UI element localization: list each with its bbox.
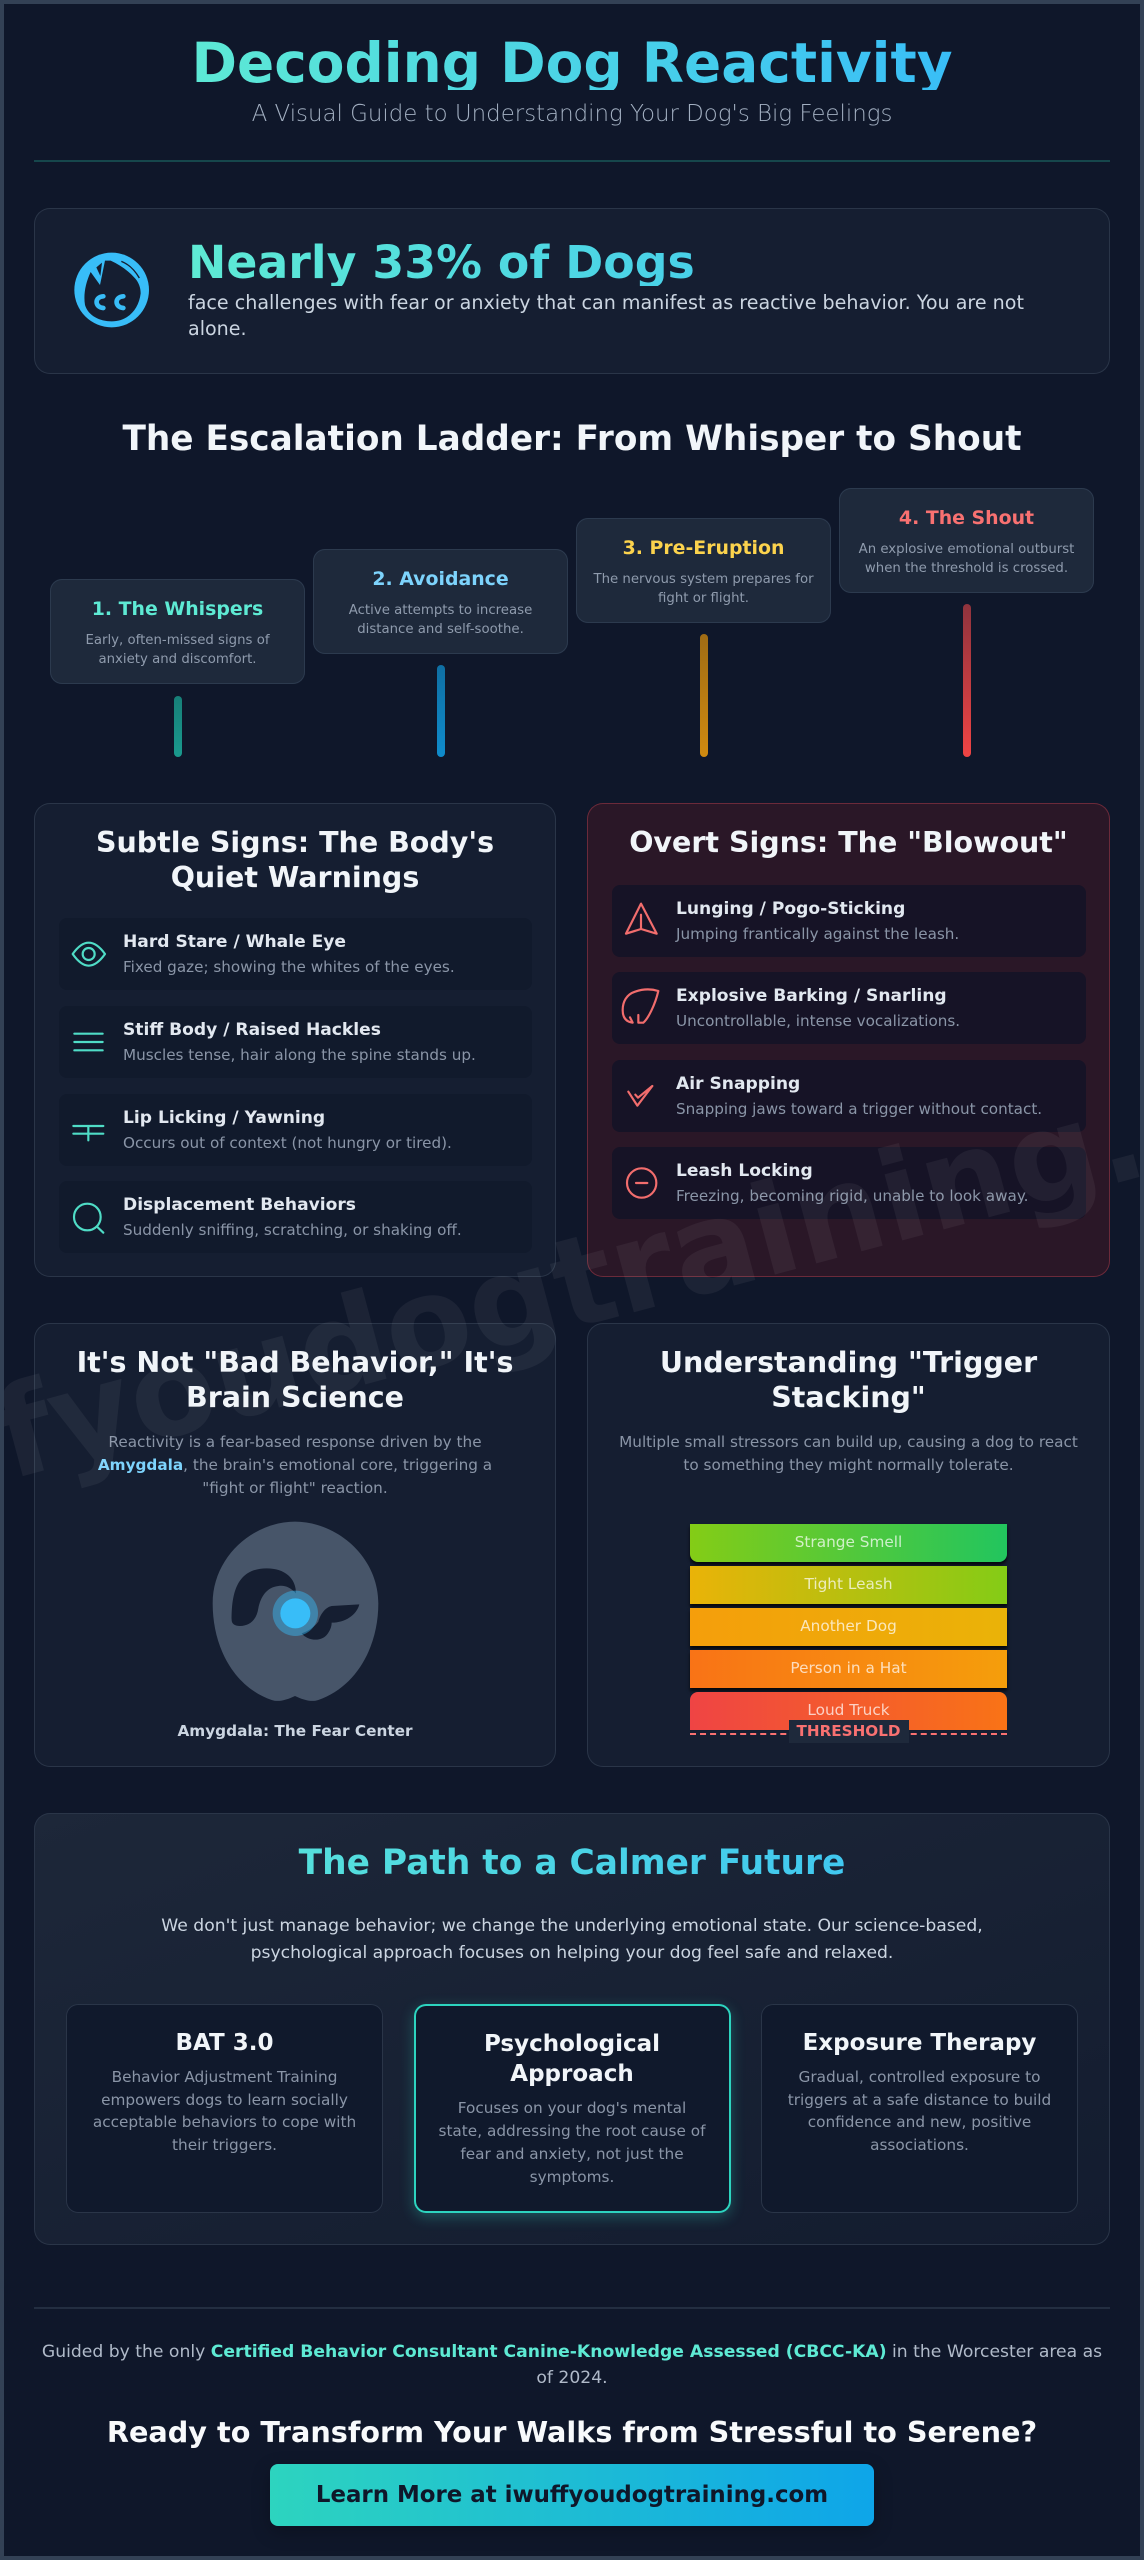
- panel heading: [77, 1346, 513, 1414]
- icon: eye: [72, 942, 106, 967]
- statistic description: [188, 291, 1024, 340]
- card: exposure therapy: associations.: [870, 2136, 969, 2154]
- sign: barking: Explosive Barking / Snarling: [676, 986, 947, 1006]
- section heading: The Path to a Calmer Future: [299, 1843, 845, 1883]
- step 2: avoidance: distance and self-soothe.: [357, 622, 524, 637]
- card: exposure therapy: confidence and new, positive: [808, 2113, 1031, 2131]
- step 1: the whispers: 1. The Whispers: [92, 598, 263, 620]
- step 4: the shout: An explosive emotional outburst: [859, 542, 1074, 557]
- card: BAT 3.0: BAT 3.0: [176, 2030, 274, 2056]
- sign: displacement: Displacement Behaviors: [123, 1195, 356, 1215]
- call to action heading: Ready to Transform Your Walks from Stressful to Serene?: [107, 2415, 1037, 2449]
- block: person in a hat: Person in a Hat: [790, 1659, 907, 1677]
- step 3: pre-eruption: fight or flight.: [658, 591, 749, 606]
- card: psychological approach: [414, 2004, 730, 2213]
- explanation text: [98, 1433, 492, 1497]
- step 2: avoidance: 2. Avoidance: [372, 568, 509, 590]
- sign: barking: Uncontrollable, intense vocalizations.: [676, 1012, 960, 1030]
- step 2: avoidance: [313, 549, 568, 757]
- sign: air snapping: Snapping jaws toward a trigger without contact.: [676, 1100, 1042, 1118]
- sign: air snapping: Air Snapping: [676, 1074, 800, 1094]
- sign: lunging: Jumping frantically against the leash.: [676, 925, 959, 943]
- icon: search: [72, 1202, 104, 1234]
- step 2: avoidance: Active attempts to increase: [349, 603, 532, 618]
- card: psychological approach: Focuses on your dog's mental: [458, 2099, 686, 2117]
- sign: displacement: Suddenly sniffing, scratching, or shaking off.: [123, 1221, 462, 1239]
- sign: stiff body: [59, 1006, 532, 1078]
- step 4: the shout: 4. The Shout: [899, 507, 1034, 529]
- panel: trigger stacking: [587, 1323, 1110, 1767]
- brain caption: Amygdala: The Fear Center: [177, 1722, 413, 1740]
- icon: snap check: [627, 1084, 654, 1107]
- panel heading: Understanding "Trigger: [660, 1346, 1037, 1379]
- explanation text: to something they might normally tolerate.: [683, 1456, 1014, 1474]
- block: loud truck: Loud Truck: [807, 1701, 890, 1719]
- sign: stiff body: Stiff Body / Raised Hackles: [123, 1020, 381, 1040]
- subtitle: A Visual Guide to Understanding Your Dog's Big Feelings: [252, 101, 892, 127]
- panel heading: Brain Science: [186, 1381, 404, 1414]
- sign: stiff body: Muscles tense, hair along the spine stands up.: [123, 1046, 476, 1064]
- icon: anxious dog face: [74, 252, 149, 328]
- call to action button: [270, 2464, 874, 2526]
- panel heading: Overt Signs: The "Blowout": [629, 826, 1068, 859]
- sign: leash locking: Freezing, becoming rigid, unable to look away.: [676, 1187, 1028, 1205]
- card: psychological approach: Approach: [510, 2061, 634, 2087]
- sign: hard stare: Fixed gaze; showing the whites of the eyes.: [123, 958, 455, 976]
- sign: displacement: [59, 1181, 532, 1253]
- icon: barking mouth: [622, 988, 660, 1024]
- sign: lunging: Lunging / Pogo-Sticking: [676, 899, 905, 919]
- panel: subtle signs: [34, 803, 556, 1277]
- trigger stack chart: [688, 1524, 1008, 1743]
- step 3: pre-eruption: [576, 518, 831, 757]
- sign: lip licking: [59, 1094, 532, 1166]
- icon: locked circle: [626, 1167, 658, 1199]
- step 3: pre-eruption: 3. Pre-Eruption: [623, 537, 784, 559]
- footer divider: [34, 2307, 1110, 2309]
- card: BAT 3.0: acceptable behaviors to cope with: [93, 2113, 356, 2131]
- explanation text: "fight or flight" reaction.: [202, 1479, 388, 1497]
- card: BAT 3.0: their triggers.: [172, 2136, 277, 2154]
- panel heading: Subtle Signs: The Body's: [96, 826, 494, 859]
- statistic description: alone.: [188, 317, 247, 340]
- explanation text: [619, 1433, 1078, 1474]
- sign: lip licking: Lip Licking / Yawning: [123, 1108, 325, 1128]
- panel heading: [96, 826, 494, 894]
- step 3: pre-eruption: The nervous system prepares for: [593, 572, 814, 587]
- panel heading: Stacking": [771, 1381, 926, 1414]
- icon: warning triangle: [624, 902, 658, 935]
- sign: hard stare: [59, 918, 532, 990]
- threshold label: THRESHOLD: [796, 1722, 900, 1740]
- panel heading: [660, 1346, 1038, 1414]
- panel: statistic callout: [34, 208, 1110, 374]
- credential text: Guided by the only Certified Behavior Consultant Canine-Knowledge Assessed (CBCC-KA) in the Worcester area as: [42, 2342, 1102, 2362]
- card: exposure therapy: triggers at a safe distance to build: [788, 2091, 1051, 2109]
- explanation text: Reactivity is a fear-based response driven by the: [108, 1433, 482, 1451]
- card: exposure therapy: Exposure Therapy: [803, 2030, 1036, 2056]
- call to action button: Learn More at iwuffyoudogtraining.com: [316, 2482, 828, 2508]
- block: strange smell: [690, 1524, 1007, 1562]
- block: another dog: Another Dog: [800, 1617, 897, 1635]
- block: loud truck: [690, 1692, 1007, 1730]
- sign: hard stare: Hard Stare / Whale Eye: [123, 932, 346, 952]
- intro text: [161, 1916, 983, 1963]
- sign: leash locking: Leash Locking: [676, 1161, 813, 1181]
- panel: overt signs: [587, 803, 1110, 1277]
- sign: leash locking: [612, 1147, 1086, 1219]
- credential text: [42, 2342, 1102, 2388]
- block: tight leash: Tight Leash: [804, 1575, 893, 1593]
- card: exposure therapy: Gradual, controlled exposure to: [798, 2068, 1041, 2086]
- card: psychological approach: symptoms.: [530, 2168, 614, 2186]
- step 1: the whispers: Early, often-missed signs of: [85, 633, 270, 648]
- icon: lip lines: [72, 1124, 104, 1142]
- title: Decoding Dog Reactivity: [191, 31, 953, 95]
- icon: stiff lines: [73, 1032, 104, 1052]
- step 1: the whispers: [50, 579, 305, 757]
- block: tight leash: [690, 1566, 1007, 1604]
- block: another dog: [690, 1608, 1007, 1646]
- card: BAT 3.0: [66, 2004, 383, 2213]
- card: BAT 3.0: Behavior Adjustment Training: [112, 2068, 337, 2086]
- explanation text: Amygdala, the brain's emotional core, triggering a: [98, 1456, 492, 1474]
- card: BAT 3.0: empowers dogs to learn socially: [101, 2091, 348, 2109]
- sign: lunging: [612, 885, 1086, 957]
- header divider: [34, 160, 1110, 162]
- statistic heading: Nearly 33% of Dogs: [188, 235, 695, 289]
- threshold dashed line: [690, 1733, 1007, 1735]
- sign: lip licking: Occurs out of context (not hungry or tired).: [123, 1134, 452, 1152]
- intro text: We don't just manage behavior; we change the underlying emotional state. Our science-based,: [161, 1916, 983, 1936]
- step 1: the whispers: anxiety and discomfort.: [98, 652, 257, 667]
- panel heading: Quiet Warnings: [171, 861, 419, 894]
- brain diagram: [212, 1522, 378, 1701]
- card: psychological approach: fear and anxiety, not just the: [460, 2145, 684, 2163]
- threshold label: [788, 1720, 908, 1743]
- intro text: psychological approach focuses on helping your dog feel safe and relaxed.: [251, 1943, 893, 1963]
- explanation text: Multiple small stressors can build up, causing a dog to react: [619, 1433, 1078, 1451]
- step 4: the shout: when the threshold is crossed.: [865, 561, 1068, 576]
- panel heading: It's Not "Bad Behavior," It's: [77, 1346, 513, 1379]
- statistic description: face challenges with fear or anxiety that can manifest as reactive behavior. You are not: [188, 291, 1024, 314]
- card: psychological approach: state, addressing the root cause of: [438, 2122, 706, 2140]
- sign: air snapping: [612, 1060, 1086, 1132]
- heading: escalation ladder: The Escalation Ladder: From Whisper to Shout: [122, 419, 1022, 459]
- block: person in a hat: [690, 1650, 1007, 1688]
- block: strange smell: Strange Smell: [795, 1533, 902, 1551]
- card: exposure therapy: [761, 2004, 1078, 2213]
- card: psychological approach: Psychological: [484, 2031, 660, 2057]
- credential text: of 2024.: [536, 2368, 608, 2388]
- panel: brain science: [34, 1323, 556, 1767]
- panel: the path to a calmer future: [34, 1813, 1110, 2245]
- sign: barking: [612, 972, 1086, 1044]
- step 4: the shout: [839, 488, 1094, 757]
